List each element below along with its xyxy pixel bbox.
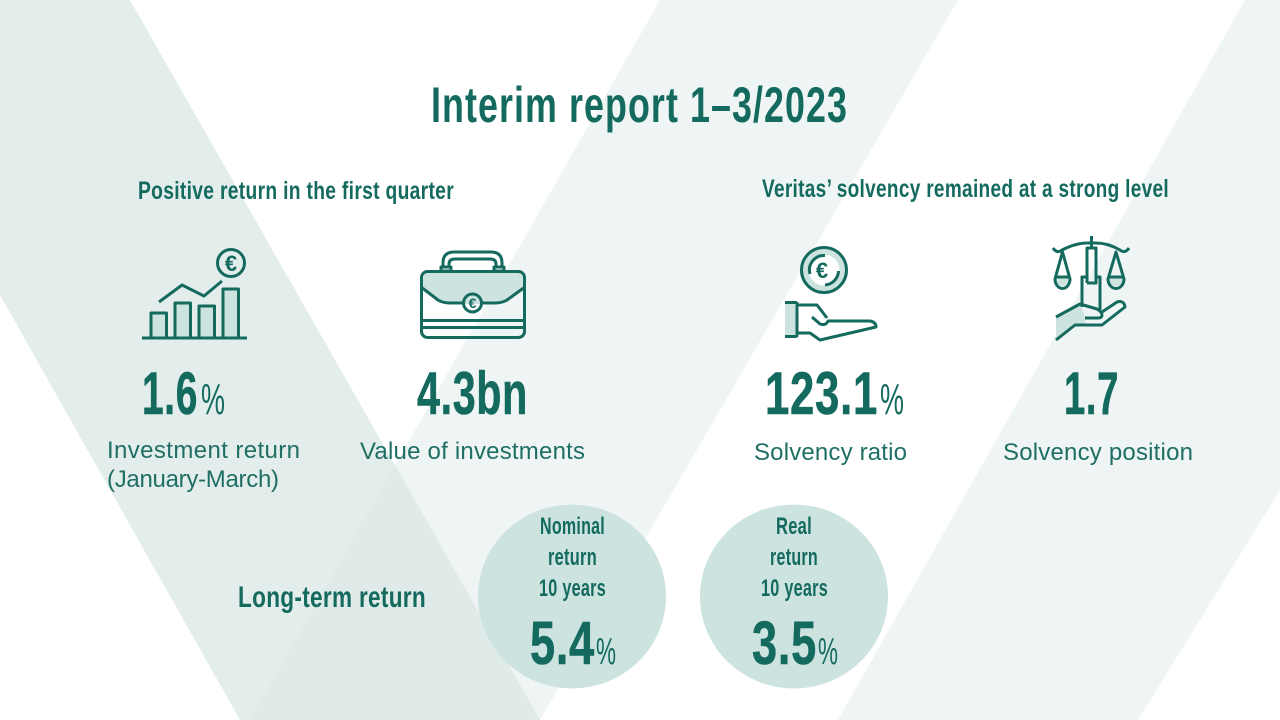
circle: real return: % [818,631,838,673]
icon: rising bar chart with euro coin: € [225,251,237,276]
metric: solvency position: Solvency position [1003,439,1193,466]
metric: investment return: 1.6 [142,360,198,427]
icon: hand with euro coin: € [816,258,828,283]
circle: nominal return: 10 years [539,575,606,602]
icon: rising bar chart with euro coin [142,250,247,338]
heading: long-term return: Long-term return [238,581,426,614]
circle: nominal return: % [596,631,616,673]
circle: nominal return: 5.4 [530,609,595,677]
circle: real return: 10 years [761,575,828,602]
metric: solvency ratio: Solvency ratio [754,439,907,466]
circle: nominal return [478,504,666,688]
metric: investment return: (January-March) [107,466,279,493]
circle: nominal return: return [548,544,597,571]
metric: solvency ratio [754,360,907,466]
metric: solvency position [1003,360,1193,466]
metric: value of investments [360,360,585,465]
metric: solvency ratio: 123.1 [765,360,878,427]
metric: solvency position: 1.7 [1064,360,1119,427]
circle: real return: Real [776,513,812,540]
heading: positive return: Positive return in the first quarter [138,177,454,205]
metric: value of investments: Value of investments [360,438,585,465]
icon: hand with euro coin [785,247,876,340]
metric: investment return: % [201,375,225,424]
metric: investment return [107,360,300,493]
icon: hand holding balance scale [1053,236,1129,340]
icon: briefcase with euro coin [421,252,525,338]
metric: investment return: Investment return [107,437,300,464]
circle: real return: 3.5 [752,609,817,677]
circle: real return: return [770,544,818,571]
metric: value of investments: 4.3bn [417,360,528,427]
title: Interim report 1–3/2023 [431,77,848,133]
circle: nominal return: Nominal [540,513,605,540]
icon: briefcase with euro coin: € [469,295,477,311]
circle: real return [700,504,888,688]
metric: solvency ratio: % [880,375,904,424]
